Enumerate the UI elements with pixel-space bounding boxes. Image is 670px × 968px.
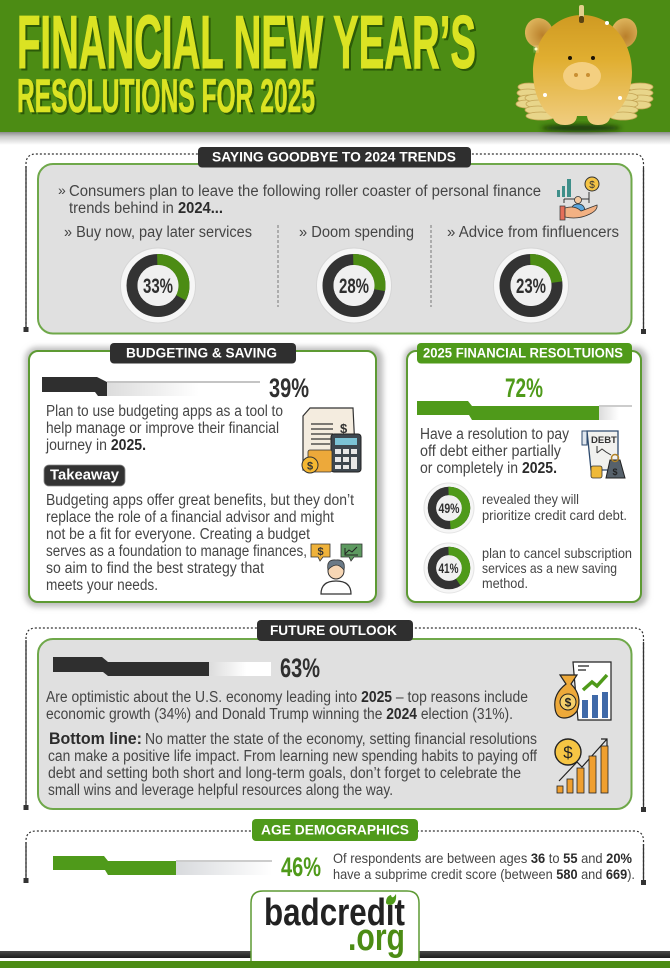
budgeting apps text [45, 403, 283, 454]
logo: badcredit.org [251, 891, 419, 961]
icon: money bag and growth chart [555, 662, 611, 720]
title: RESOLUTIONS FOR 2025 [17, 69, 315, 122]
debt text: or completely in 2025. [420, 460, 557, 477]
bar chart: 39%: 39% [269, 373, 309, 403]
bottom line text: Bottom line: [49, 730, 142, 748]
subscriptions text: method. [482, 575, 528, 591]
panel: outlook [38, 639, 632, 809]
label: doom spending: » Doom spending [299, 224, 414, 241]
stat: 72%: 72% [505, 373, 543, 403]
label: buy now pay later: » Buy now, pay later services [64, 224, 252, 241]
bottom line text: small wins and leverage helpful resources along the way. [48, 782, 393, 799]
icon: advisor with speech bubbles [311, 544, 362, 594]
panel: 2025 financial resolutions [404, 343, 647, 607]
bottom line text: No matter the state of the economy, setting financial resolutions [145, 731, 537, 748]
bar chart: 63%: 63% [280, 653, 320, 683]
intro text: trends behind in 2024... [69, 200, 223, 217]
takeaway text: so aim to find the best strategy that [46, 560, 265, 577]
donut: 41% [424, 543, 474, 593]
heading: future outlook: FUTURE OUTLOOK [270, 622, 397, 638]
optimism text [46, 689, 528, 723]
icon: debt document: $ [612, 467, 618, 477]
takeaway tag: Takeaway [50, 468, 119, 484]
heading: age demographics [252, 819, 418, 841]
subscriptions text [482, 545, 632, 591]
bottom line text: can make a positive life impact. From learning new spending habits to paying off [48, 748, 538, 765]
demographics text: have a subprime credit score (between 580 and 669). [333, 866, 635, 882]
icon: debt document: DEBT [591, 435, 617, 446]
bar chart: 46%: 46% [281, 852, 321, 882]
optimism text: Are optimistic about the U.S. economy leading into 2025 – top reasons include [46, 689, 528, 706]
takeaway text: replace the role of a financial advisor and might [46, 509, 335, 526]
budgeting apps text: help manage or improve their financial [46, 420, 279, 437]
bottom line text [48, 730, 538, 799]
icon: advisor with speech bubbles: $ [317, 546, 324, 558]
heading: future outlook [257, 620, 413, 641]
donut: 41%: 41% [438, 560, 459, 576]
section: saying goodbye to 2024 trends [24, 147, 646, 334]
section: age demographics [24, 819, 646, 885]
footer bands [0, 951, 670, 968]
bar chart: 39% [42, 373, 309, 403]
icon: coin and rising bars: $ [563, 743, 573, 762]
title: RESOLUTIONS FOR 2025 [19, 71, 317, 124]
takeaway text: serves as a foundation to manage finances, [46, 543, 307, 560]
header banner [0, 0, 670, 145]
intro text: Consumers plan to leave the following roller coaster of personal finance [69, 183, 541, 200]
debt text: Have a resolution to pay [420, 426, 569, 443]
icon: bill and calculator [302, 408, 361, 473]
debt text: off debt either partially [420, 443, 561, 460]
donut: 28%: 28% [339, 275, 369, 298]
intro text [58, 182, 541, 217]
subscriptions text: plan to cancel subscription [482, 545, 632, 561]
heading: 2025 financial resolutions: 2025 FINANCIAL RESOLTUIONS [423, 344, 623, 360]
takeaway text: not be a fit for everyone. Creating a budget [46, 526, 311, 543]
takeaway tag [44, 465, 125, 486]
icon: hand holding chart and coin: $ [589, 180, 595, 191]
demographics text: Of respondents are between ages 36 to 55 and 20% [333, 850, 632, 866]
takeaway text [46, 492, 355, 594]
icon: bill and calculator: $ [307, 460, 313, 472]
icon: golden piggy bank with coins [516, 5, 653, 132]
bar chart: 63% [53, 653, 320, 683]
donut: 23% [494, 248, 568, 323]
donut: 49% [424, 483, 474, 533]
credit card text: revealed they will [482, 491, 579, 507]
bar chart: 46% [53, 852, 321, 882]
takeaway text: Budgeting apps offer great benefits, but they don’t [46, 492, 355, 509]
credit card text: prioritize credit card debt. [482, 507, 627, 523]
credit card text [482, 491, 627, 523]
donut: 33% [120, 248, 196, 323]
icon: bill and calculator: $ [340, 421, 348, 436]
budgeting apps text: journey in 2025. [45, 437, 146, 454]
debt text [420, 426, 569, 477]
heading: age demographics: AGE DEMOGRAPHICS [261, 822, 409, 838]
heading: budgeting and saving [110, 343, 296, 364]
optimism text: economic growth (34%) and Donald Trump winning the 2024 election (31%). [46, 706, 513, 723]
icon: hand holding chart and coin [557, 177, 599, 220]
donut: 49%: 49% [438, 500, 460, 516]
bar chart: 72% [417, 401, 632, 420]
icon: money bag and growth chart: $ [565, 696, 572, 710]
logo: badcredit.org: .org [348, 917, 405, 959]
intro text: » [58, 182, 66, 198]
section: future outlook [24, 620, 646, 812]
icon: debt document [582, 431, 625, 478]
label: advice from finfluencers: » Advice from finfluencers [447, 224, 619, 241]
title [17, 0, 478, 124]
logo: badcredit.org: badcredit [264, 892, 405, 934]
heading: budgeting and saving: BUDGETING & SAVING [126, 344, 277, 360]
heading: saying goodbye: SAYING GOODBYE TO 2024 TRENDS [212, 148, 456, 164]
subscriptions text: services as a new saving [482, 560, 617, 576]
bottom line text: debt and setting both short and long-term goals, don’t forget to celebrate the [48, 765, 521, 782]
icon: coin and rising bars [555, 739, 608, 793]
panel: budgeting and saving [25, 343, 383, 607]
donut: 28% [316, 248, 392, 323]
donut: 33%: 33% [143, 275, 173, 298]
budgeting apps text: Plan to use budgeting apps as a tool to [46, 403, 283, 420]
takeaway text: meets your needs. [46, 577, 158, 594]
donut: 23%: 23% [516, 275, 546, 298]
demographics text [333, 850, 635, 882]
panel: trends [38, 164, 632, 334]
